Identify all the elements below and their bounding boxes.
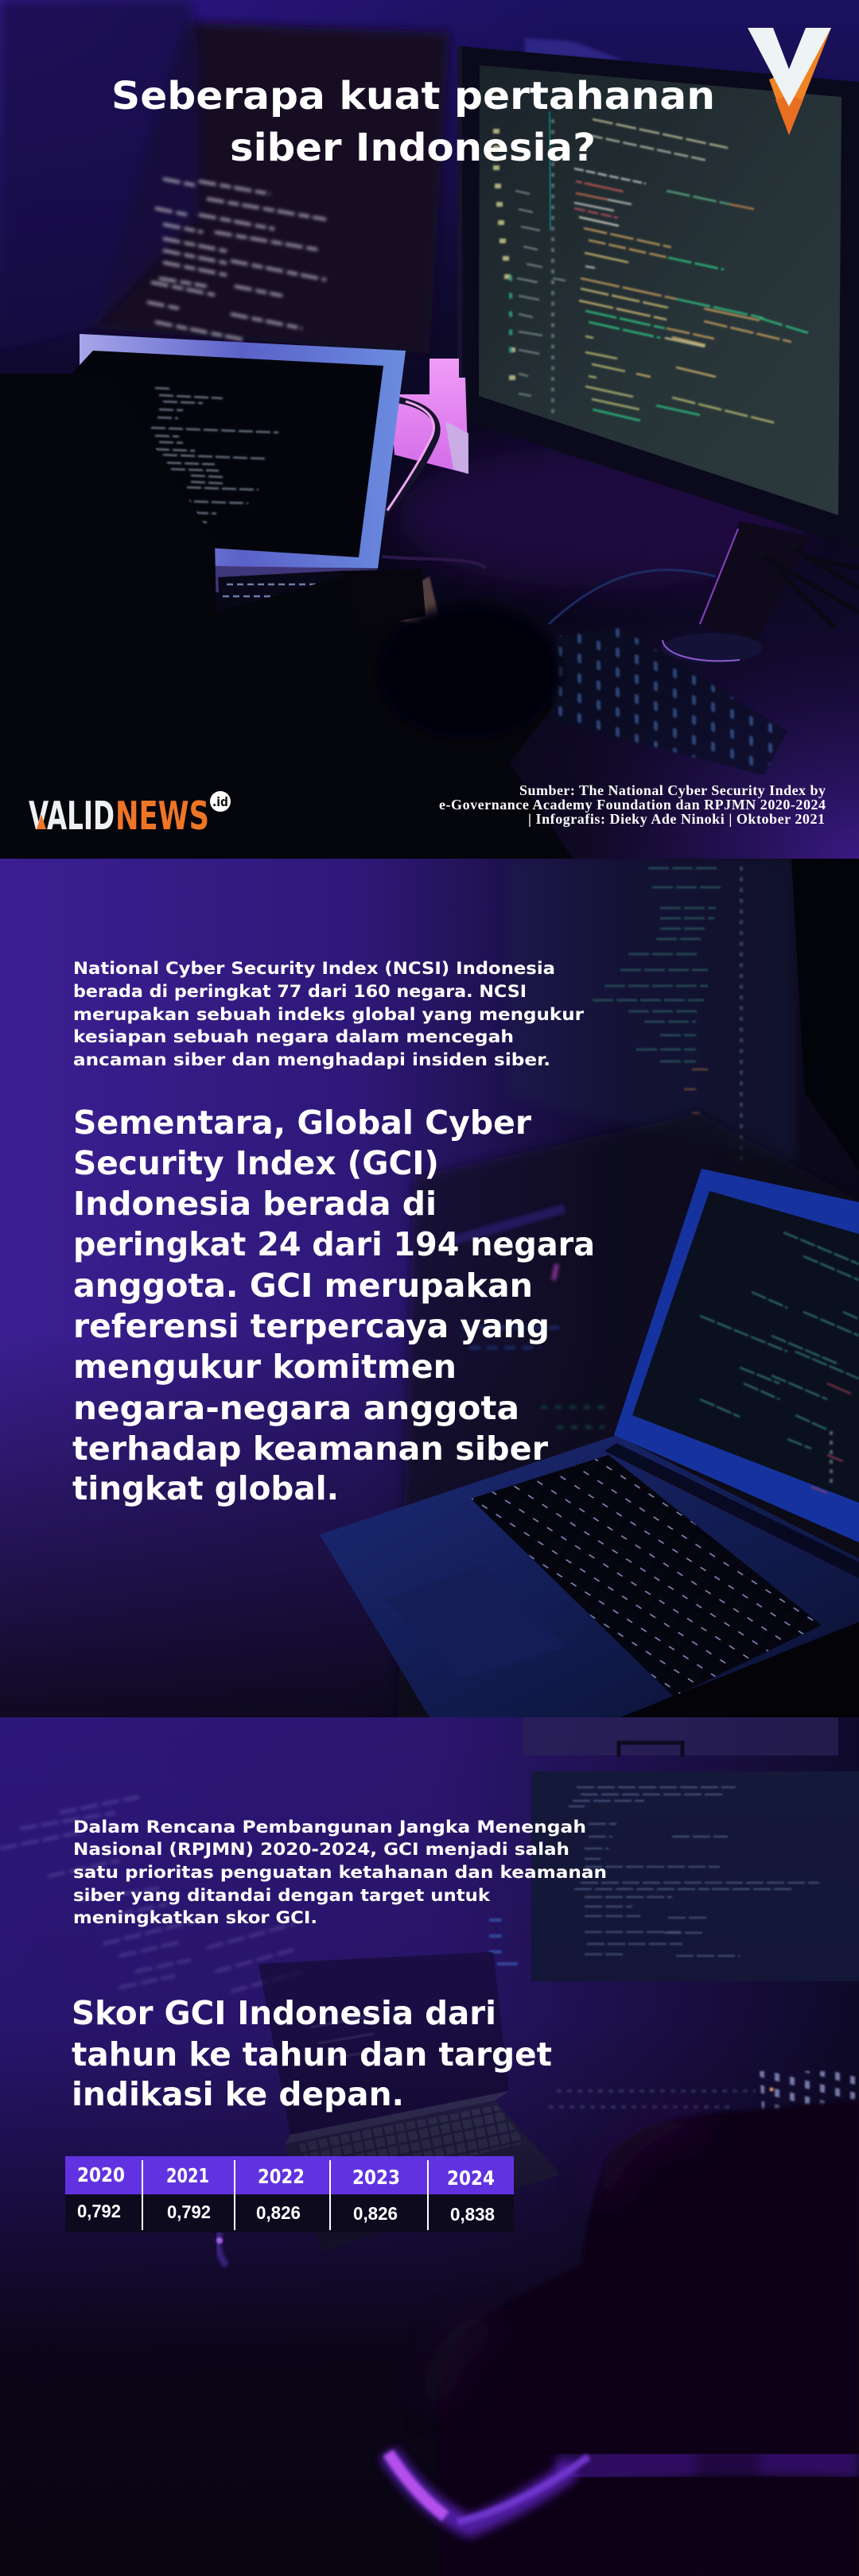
text block: RPJMN paragraph: Dalam Rencana Pembangunan Jangka Menengah: [73, 1818, 586, 1837]
photo: hacker at computers: [0, 0, 859, 859]
logo: Validnews: [29, 791, 231, 839]
text block: GCI explanation: anggota. GCI merupakan: [73, 1267, 533, 1305]
table: GCI scores 2020-2024: 0,826: [256, 2202, 301, 2223]
text block: RPJMN paragraph: satu prioritas penguatan ketahanan dan keamanan: [73, 1863, 607, 1883]
photo: hooded figure at desk: [0, 1717, 859, 2576]
table: GCI scores 2020-2024: 2020: [77, 2163, 125, 2186]
text block: GCI explanation: mengukur komitmen: [73, 1348, 457, 1386]
heading: GCI score: [72, 1994, 552, 2113]
heading: title: siber Indonesia?: [230, 126, 596, 170]
panel: RPJMN and GCI scores: [0, 1717, 859, 2576]
text block: GCI explanation: Sementara, Global Cyber: [73, 1104, 532, 1142]
photo: laptop with code: [0, 859, 859, 1717]
table: GCI scores 2020-2024: 0,792: [167, 2202, 211, 2222]
text block: GCI explanation: Security Index (GCI): [73, 1144, 439, 1182]
text block: GCI explanation: terhadap keamanan siber: [72, 1430, 549, 1468]
text block: RPJMN paragraph: meningkatkan skor GCI.: [73, 1908, 317, 1928]
source credit: | Infografis: Dieky Ade Ninoki | Oktober 2021: [528, 811, 825, 827]
logo: Validnews: .id: [212, 794, 228, 809]
heading: GCI score: tahun ke tahun dan target: [72, 2035, 552, 2074]
table: GCI scores 2020-2024: 0,838: [450, 2204, 495, 2225]
heading: GCI score: indikasi ke depan.: [72, 2075, 404, 2113]
text block: GCI explanation: Indonesia berada di: [73, 1185, 437, 1223]
table: GCI scores 2020-2024: 2021: [166, 2164, 209, 2187]
heading: title: [111, 74, 715, 170]
table: GCI scores 2020-2024: 0,826: [353, 2203, 398, 2224]
text block: RPJMN paragraph: [73, 1818, 607, 1928]
text block: RPJMN paragraph: siber yang ditandai dengan target untuk: [73, 1886, 491, 1906]
text block: GCI explanation: referensi terpercaya yang: [73, 1307, 550, 1345]
text block: NCSI explanation: [73, 959, 584, 1070]
text block: RPJMN paragraph: Nasional (RPJMN) 2020-2024, GCI menjadi salah: [73, 1840, 569, 1860]
icon: V logo: [748, 28, 831, 135]
table: GCI scores 2020-2024: 0,792: [77, 2201, 121, 2221]
logo: Validnews: VALID: [29, 793, 115, 839]
table: GCI scores 2020-2024: 2024: [447, 2167, 495, 2190]
source credit: [439, 782, 826, 827]
text block: GCI explanation: [72, 1104, 595, 1507]
heading: title: Seberapa kuat pertahanan: [111, 74, 715, 118]
table: GCI scores 2020-2024: 2022: [258, 2165, 305, 2188]
text block: GCI explanation: negara-negara anggota: [73, 1389, 519, 1427]
text block: GCI explanation: peringkat 24 dari 194 negara: [73, 1225, 595, 1263]
text block: NCSI explanation: berada di peringkat 77 dari 160 negara. NCSI: [73, 982, 527, 1002]
source credit: e-Governance Academy Foundation dan RPJMN 2020-2024: [439, 797, 826, 813]
text block: GCI explanation: tingkat global.: [72, 1469, 339, 1507]
text block: NCSI explanation: National Cyber Security Index (NCSI) Indonesia: [73, 959, 555, 979]
panel: cover photo with title: [0, 0, 859, 859]
panel: NCSI and GCI explanation: [0, 859, 859, 1717]
heading: GCI score: Skor GCI Indonesia dari: [72, 1994, 496, 2032]
text block: NCSI explanation: merupakan sebuah indeks global yang mengukur: [73, 1005, 584, 1025]
text block: NCSI explanation: ancaman siber dan menghadapi insiden siber.: [73, 1050, 550, 1070]
table: GCI scores 2020-2024: [65, 2156, 514, 2233]
table: GCI scores 2020-2024: 2023: [352, 2166, 400, 2189]
logo: Validnews: NEWS: [115, 793, 209, 839]
source credit: Sumber: The National Cyber Security Index by: [519, 782, 826, 798]
text block: NCSI explanation: kesiapan sebuah negara dalam mencegah: [73, 1027, 514, 1047]
